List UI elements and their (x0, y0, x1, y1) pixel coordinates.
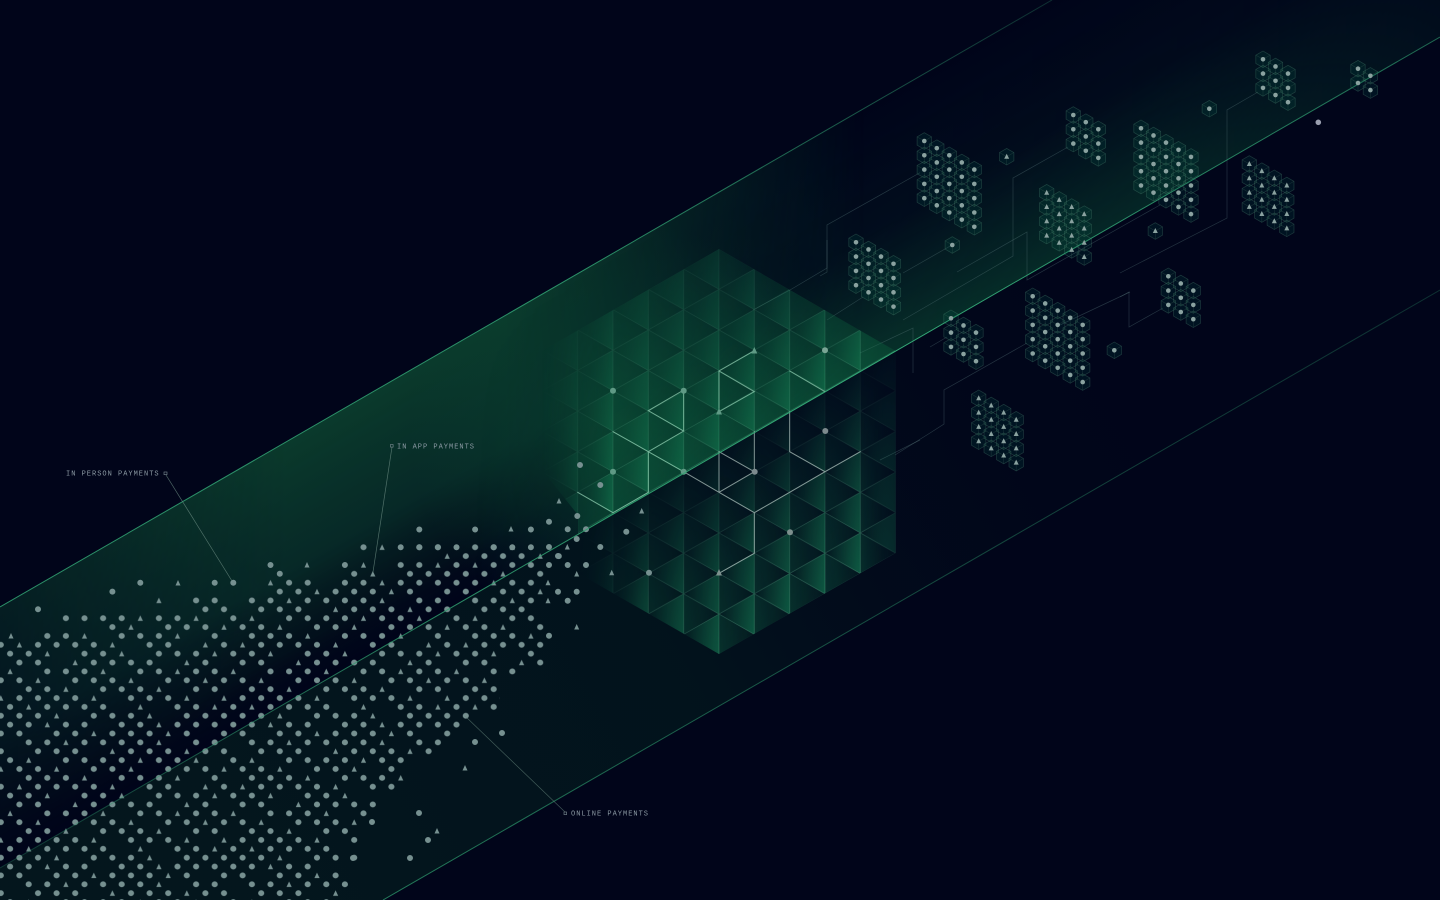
block: output cluster 7 (1134, 120, 1198, 222)
block: output cluster 5 (1256, 51, 1295, 110)
callout: online payments (465, 716, 649, 818)
cube lower half (602, 367, 896, 654)
scattered fringe dots (38, 465, 649, 858)
icon: single dot cube lower right (1107, 342, 1122, 359)
callout: in person payments: IN PERSON PAYMENTS (66, 470, 160, 478)
callout: online payments: ONLINE PAYMENTS (571, 810, 649, 818)
icon: single triangle cube right (1148, 223, 1162, 239)
block: output cluster 6 (1351, 60, 1378, 98)
block: output cluster 4 (849, 234, 901, 315)
block: output cluster 12 (972, 390, 1023, 471)
block: output cluster 10 (944, 310, 983, 370)
highlighted cube paths (578, 351, 860, 573)
callout: in app payments (373, 444, 475, 572)
block: output cluster 3 (1040, 184, 1091, 265)
block: output cluster 1 (917, 133, 982, 235)
cube node markers (610, 347, 828, 576)
chart: payment dot cloud (0, 465, 649, 900)
callout: in person payments (66, 470, 232, 581)
cube upper half (556, 249, 896, 534)
icon: loose dot (1316, 120, 1321, 125)
block: output cluster 8 (1242, 156, 1294, 237)
callout: in app payments: IN APP PAYMENTS (397, 444, 475, 452)
output clusters (849, 51, 1378, 471)
icon: single dot cube (945, 237, 960, 253)
block: output cluster 2 (1066, 107, 1106, 166)
block: output cluster 9 (1161, 268, 1200, 328)
icon: single triangle cube (1000, 148, 1014, 165)
chart: isometric processing cube (540, 240, 900, 660)
icon: single dot cube upper right (1202, 100, 1216, 117)
connector lines between blocks (753, 92, 1258, 460)
block: output cluster 11 (1026, 288, 1090, 390)
